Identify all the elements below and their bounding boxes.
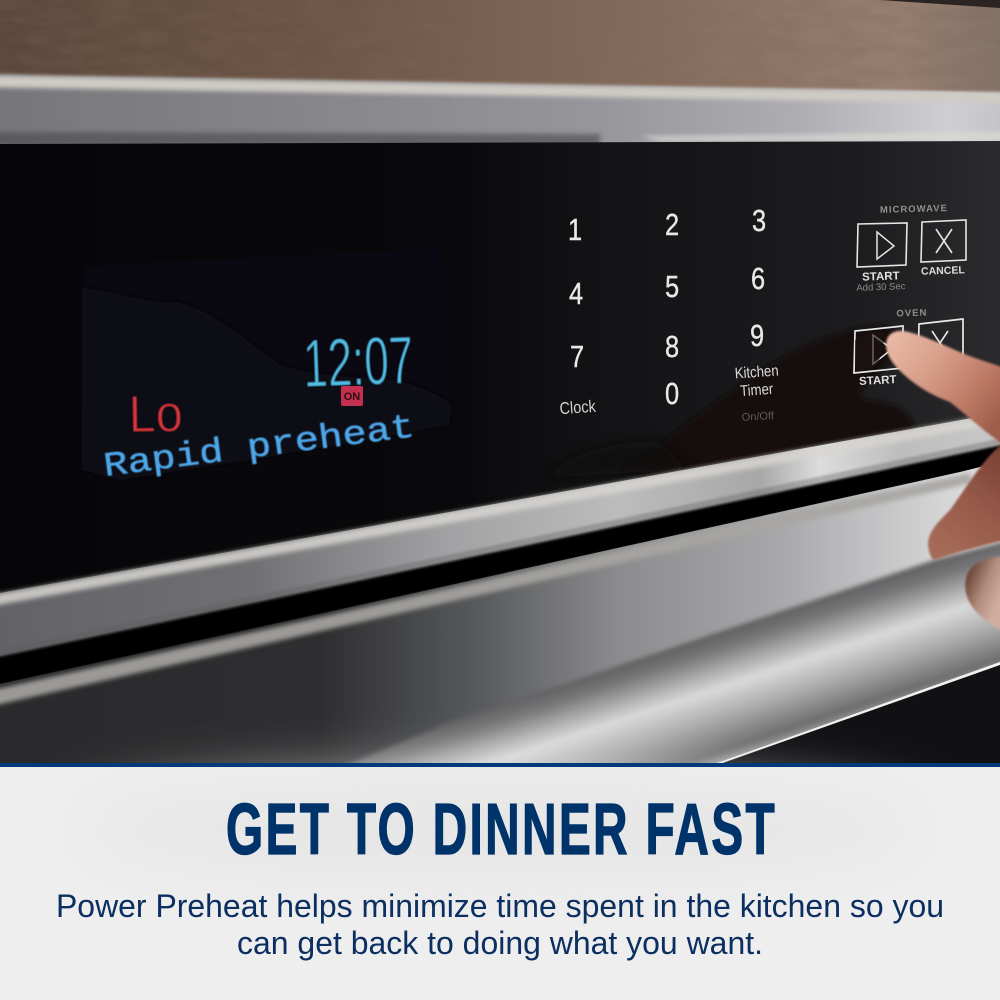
number keypad: 2 (665, 208, 679, 243)
number keypad: 7 (570, 340, 584, 375)
navy divider band (0, 763, 1000, 767)
number keypad: On/Off (741, 410, 775, 424)
microwave controls: MICROWAVE (880, 203, 948, 216)
hand (886, 331, 1000, 632)
photo: oven control panel (0, 0, 1000, 768)
number keypad: 4 (569, 277, 583, 312)
display window (84, 286, 450, 478)
handle lower rounded bar (340, 540, 1000, 768)
dark oven door (723, 665, 1000, 763)
body text: can get back to doing what you want. (237, 925, 763, 961)
number keypad: 9 (750, 319, 764, 354)
oven controls (854, 307, 963, 388)
cancel button (918, 318, 964, 356)
on badge: ON (344, 391, 360, 403)
number keypad: Clock (559, 398, 596, 419)
palm (928, 442, 1000, 560)
body text: Power Preheat helps minimize time spent in the kitchen so you (56, 888, 944, 924)
number keypad: 6 (751, 262, 765, 297)
number keypad: 0 (665, 377, 679, 412)
reflection on display (82, 288, 452, 480)
number keypad: 1 (568, 213, 582, 248)
oven controls: START (859, 374, 897, 388)
clock readout: 12:07 (302, 322, 414, 402)
start button (857, 223, 907, 267)
temperature readout: Lo (128, 385, 183, 444)
number keypad: Timer (740, 381, 774, 400)
start button (854, 326, 903, 373)
microwave controls (856, 203, 966, 294)
handle upper face (0, 462, 1000, 763)
status readout: Rapid preheat (102, 409, 417, 487)
microwave controls: Add 30 Sec (856, 281, 906, 294)
number keypad: 5 (665, 270, 679, 305)
finger reflection in glass (624, 324, 916, 475)
index finger (886, 331, 1000, 446)
microwave controls: CANCEL (921, 264, 966, 278)
black gap (0, 439, 1000, 692)
number keypad: 3 (752, 204, 766, 239)
thumb (965, 556, 1000, 632)
on badge (341, 386, 363, 406)
number keypad: 8 (665, 330, 679, 365)
stainless trim below panel (0, 408, 1000, 666)
number keypad (559, 204, 779, 424)
footer panel (0, 763, 1000, 1000)
microwave controls: START (862, 270, 900, 284)
body text (56, 888, 944, 961)
wood cabinet (0, 0, 1000, 100)
black glass panel (0, 141, 1000, 595)
oven controls: OVEN (896, 307, 928, 320)
cancel button (921, 220, 966, 262)
steel top trim (0, 74, 1000, 146)
number keypad: Kitchen (734, 363, 779, 383)
